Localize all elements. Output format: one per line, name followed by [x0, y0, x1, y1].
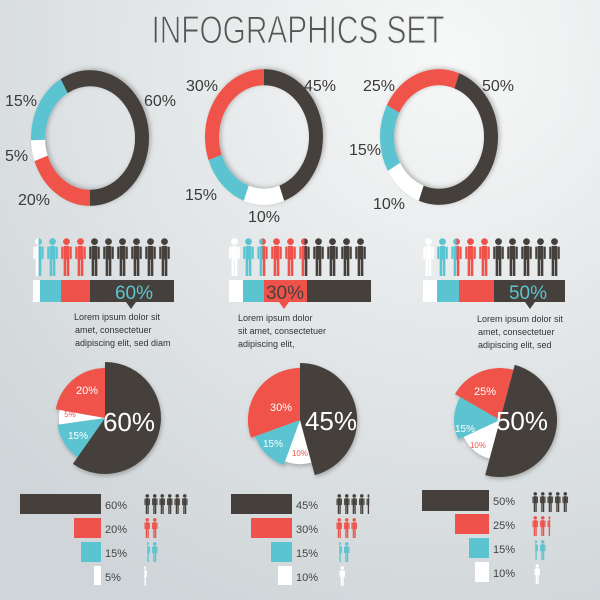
- text block 3: amet, consectetuer: [478, 327, 555, 337]
- bar legend 1: [20, 494, 188, 586]
- donut chart 3: 25%: [363, 78, 395, 95]
- donut chart 1: 20%: [18, 192, 50, 209]
- donut chart 3: 50%: [482, 78, 514, 95]
- donut chart 1: 5%: [5, 148, 28, 165]
- text block 3: Lorem ipsum dolor sit: [477, 314, 564, 324]
- pie chart 2: 45%: [305, 406, 357, 436]
- pie chart 2: 10%: [292, 449, 308, 458]
- stacked bar 3: 50%: [509, 283, 547, 304]
- bar legend 3: 25%: [493, 520, 515, 532]
- bar legend 2: [231, 494, 372, 586]
- people row 2: [229, 238, 366, 276]
- text block 3: adipiscing elit, sed: [478, 340, 552, 350]
- text block 1: amet, consectetuer: [75, 325, 152, 335]
- stacked bar 1: [33, 280, 174, 309]
- bar legend 3: 10%: [493, 568, 515, 580]
- donut chart 3: 15%: [349, 142, 381, 159]
- text block 2: adipiscing elit,: [238, 339, 295, 349]
- pie chart 1: 60%: [103, 407, 155, 437]
- bar legend 1: 5%: [105, 572, 121, 584]
- pie chart 3: 25%: [474, 386, 496, 398]
- pie chart 1: 15%: [68, 431, 88, 442]
- bar legend 2: 45%: [296, 500, 318, 512]
- donut chart 2: [185, 77, 336, 226]
- pie chart 3: [454, 365, 557, 477]
- pie chart 2: [248, 363, 357, 475]
- bar legend 1: 60%: [105, 500, 127, 512]
- stacked bar 3: [423, 280, 565, 309]
- donut chart 2: 10%: [248, 209, 280, 226]
- donut chart 2: 30%: [186, 78, 218, 95]
- bar legend 1: 20%: [105, 524, 127, 536]
- donut chart 2: 15%: [185, 187, 217, 204]
- pie chart 1: 5%: [64, 410, 76, 419]
- bar legend 2: 15%: [296, 548, 318, 560]
- text block 1: [74, 312, 171, 348]
- people row 3: [423, 238, 560, 276]
- title: INFOGRAPHICS SET: [152, 9, 444, 52]
- people row 1: [33, 238, 170, 276]
- text block 2: sit amet, consectetuer: [238, 326, 326, 336]
- pie chart 3: 10%: [470, 441, 486, 450]
- donut chart 3: [349, 77, 514, 213]
- donut chart 1: 60%: [144, 93, 176, 110]
- stacked bar 2: [229, 280, 371, 309]
- donut chart 1: 15%: [5, 93, 37, 110]
- text block 2: [238, 313, 326, 349]
- bar legend 3: [422, 490, 568, 584]
- pie chart 1: 20%: [76, 385, 98, 397]
- bar legend 3: 15%: [493, 544, 515, 556]
- panel: people bar 1: [33, 238, 174, 348]
- stacked bar 2: 30%: [266, 283, 304, 304]
- text block 3: [477, 314, 564, 350]
- pie chart 3: 15%: [455, 424, 475, 435]
- text block 1: Lorem ipsum dolor sit: [74, 312, 161, 322]
- pie chart 2: 15%: [263, 439, 283, 450]
- pie chart 2: 30%: [270, 402, 292, 414]
- stacked bar 1: 60%: [115, 283, 153, 304]
- panel: people bar 3: [423, 238, 565, 350]
- bar legend 1: 15%: [105, 548, 127, 560]
- pie chart 1: [56, 362, 161, 474]
- bar legend 2: 30%: [296, 524, 318, 536]
- panel: people bar 2: [229, 238, 371, 349]
- donut chart 1: [5, 78, 176, 209]
- pie chart 3: 50%: [496, 406, 548, 436]
- donut chart 3: 10%: [373, 196, 405, 213]
- bar legend 3: 50%: [493, 496, 515, 508]
- bar legend 2: 10%: [296, 572, 318, 584]
- text block 2: Lorem ipsum dolor: [238, 313, 313, 323]
- text block 1: adipiscing elit, sed diam: [75, 338, 171, 348]
- donut chart 2: 45%: [304, 78, 336, 95]
